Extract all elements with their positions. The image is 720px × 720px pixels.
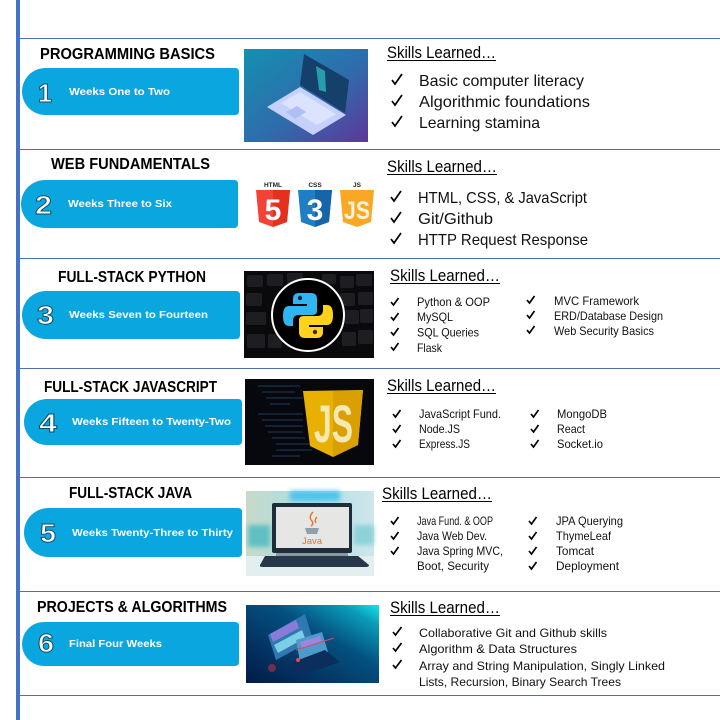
week pill 2: 2 bbox=[35, 190, 52, 220]
skills list: Lists, Recursion, Binary Search Trees bbox=[419, 675, 621, 689]
image: javascript shield on code bbox=[245, 379, 374, 465]
week pill 4 bbox=[24, 399, 242, 445]
heading: full-stack python: FULL-STACK PYTHON bbox=[58, 269, 206, 286]
skills list: Algorithm & Data Structures bbox=[419, 642, 577, 656]
image: digital screens bbox=[246, 605, 379, 683]
week pill 6 bbox=[22, 622, 239, 666]
icons: html css js shields: JS bbox=[353, 182, 362, 189]
skills list, left column: JavaScript Fund. bbox=[419, 407, 501, 421]
skills list bbox=[391, 190, 588, 249]
skills list, left column: Node.JS bbox=[419, 422, 460, 436]
icons: html css js shields bbox=[256, 182, 374, 227]
skills list, right column bbox=[531, 407, 607, 451]
skills list: Collaborative Git and Github skills bbox=[419, 626, 607, 640]
week pill 3 bbox=[22, 291, 240, 339]
skills list, left column: Express.JS bbox=[419, 437, 470, 451]
skills list: HTML, CSS, & JavaScript bbox=[418, 190, 588, 207]
skills list: Array and String Manipulation, Singly Linked bbox=[419, 659, 665, 673]
week pill 6: 6 bbox=[38, 628, 54, 658]
skills list, right column: Tomcat bbox=[556, 544, 595, 558]
panel: web fundamentals bbox=[21, 156, 588, 249]
skills list, left column: SQL Queries bbox=[417, 326, 479, 340]
left vertical rule bbox=[16, 0, 20, 720]
skills list, right column: React bbox=[557, 422, 586, 436]
skills list: HTTP Request Response bbox=[418, 232, 588, 249]
skills list: Learning stamina bbox=[419, 115, 540, 132]
skills list, right column: ERD/Database Design bbox=[554, 309, 663, 323]
skills list, right column: JPA Querying bbox=[556, 514, 623, 528]
week pill 4: Weeks Fifteen to Twenty-Two bbox=[72, 416, 231, 428]
skills list, left column bbox=[391, 295, 490, 355]
heading: projects and algorithms: PROJECTS & ALGORITHMS bbox=[37, 599, 227, 616]
heading: web fundamentals: WEB FUNDAMENTALS bbox=[51, 156, 210, 173]
skills heading: Skills Learned… bbox=[382, 484, 492, 503]
week pill 5: 5 bbox=[40, 518, 56, 548]
heading: programming basics: PROGRAMMING BASICS bbox=[40, 46, 215, 63]
week pill 3: 3 bbox=[37, 300, 54, 330]
week pill 1 bbox=[22, 68, 239, 115]
skills heading: Skills Learned… bbox=[390, 266, 500, 285]
skills list, left column: Java Web Dev. bbox=[417, 529, 487, 543]
week pill 1: 1 bbox=[38, 78, 52, 108]
heading: full-stack java: FULL-STACK JAVA bbox=[69, 485, 192, 502]
skills list, right column: MVC Framework bbox=[554, 294, 640, 308]
panel: full-stack java bbox=[24, 484, 623, 576]
skills heading: Skills Learned… bbox=[387, 43, 496, 62]
skills list: Basic computer literacy bbox=[419, 73, 584, 90]
skills heading: Skills Learned… bbox=[387, 157, 497, 176]
skills list, right column: Deployment bbox=[556, 559, 620, 573]
week pill 1: Weeks One to Two bbox=[69, 86, 170, 98]
skills list bbox=[393, 626, 665, 689]
skills list, right column: Socket.io bbox=[557, 437, 603, 451]
skills list, left column: Java Fund. & OOP bbox=[417, 514, 493, 528]
week pill 4: 4 bbox=[39, 408, 58, 438]
week pill 2 bbox=[21, 180, 238, 228]
skills list, right column bbox=[527, 294, 663, 338]
skills list, right column: MongoDB bbox=[557, 407, 607, 421]
icons: html css js shields: JS bbox=[344, 197, 370, 225]
skills list, right column: Web Security Basics bbox=[554, 324, 654, 338]
week pill 2: Weeks Three to Six bbox=[68, 198, 172, 210]
icons: html css js shields: 3 bbox=[307, 194, 323, 227]
skills list, left column: Python & OOP bbox=[417, 295, 490, 309]
panel: full-stack python bbox=[22, 266, 663, 358]
image: laptop bbox=[244, 49, 368, 142]
skills list, left column: Java Spring MVC, bbox=[417, 544, 503, 558]
skills list, left column: Boot, Security bbox=[417, 559, 489, 573]
skills list, left column: MySQL bbox=[417, 310, 453, 324]
panel: projects and algorithms bbox=[22, 598, 665, 689]
heading: full-stack javascript: FULL-STACK JAVASCRIPT bbox=[44, 379, 217, 396]
image: java on laptop: Java bbox=[302, 536, 323, 547]
skills list, right column bbox=[529, 514, 623, 573]
skills list: Git/Github bbox=[418, 211, 493, 228]
skills heading: Skills Learned… bbox=[387, 376, 496, 395]
week pill 5: Weeks Twenty-Three to Thirty bbox=[72, 527, 233, 539]
skills list: Algorithmic foundations bbox=[419, 94, 590, 111]
week pill 5 bbox=[24, 508, 242, 557]
skills list, right column: ThymeLeaf bbox=[556, 529, 612, 543]
skills list, left column: Flask bbox=[417, 341, 443, 355]
icons: html css js shields: 5 bbox=[265, 194, 281, 227]
image: python logo on keyboard bbox=[244, 271, 374, 358]
skills list, left column bbox=[393, 407, 501, 451]
skills heading: Skills Learned… bbox=[390, 598, 500, 617]
skills list, left column bbox=[391, 514, 503, 573]
image: javascript shield on code: JS bbox=[314, 395, 353, 454]
image: java on laptop bbox=[246, 491, 374, 576]
skills list bbox=[392, 73, 590, 132]
week pill 6: Final Four Weeks bbox=[69, 638, 162, 650]
panel: full-stack javascript bbox=[24, 376, 607, 465]
panel: programming basics bbox=[22, 43, 590, 142]
icons: html css js shields: CSS bbox=[308, 182, 322, 189]
week pill 3: Weeks Seven to Fourteen bbox=[69, 309, 208, 321]
icons: html css js shields: HTML bbox=[264, 182, 282, 189]
